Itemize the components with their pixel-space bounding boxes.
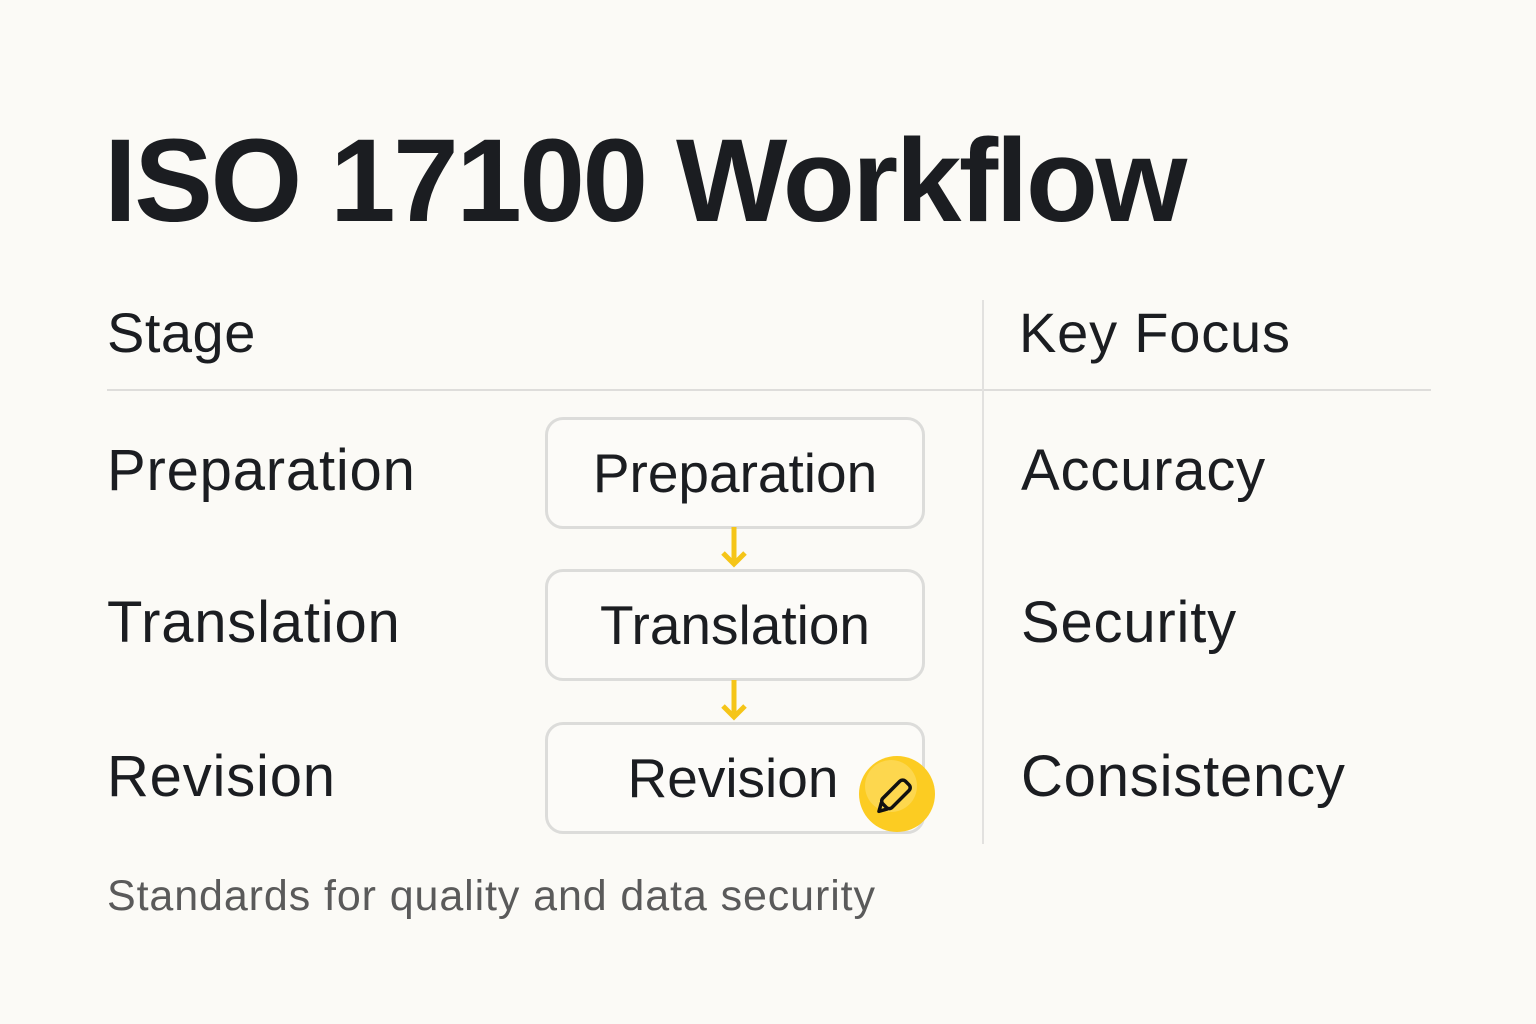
arrow 1 bbox=[721, 527, 747, 568]
stage: revision: Revision bbox=[107, 744, 336, 809]
stage: translation: Translation bbox=[107, 590, 401, 655]
focus: consistency: Consistency bbox=[1021, 744, 1346, 809]
box: preparation bbox=[545, 417, 925, 529]
focus: accuracy: Accuracy bbox=[1021, 438, 1266, 503]
box: revision bbox=[545, 722, 925, 834]
box: preparation: Preparation bbox=[593, 442, 877, 504]
table lines bbox=[107, 389, 1431, 391]
focus: security: Security bbox=[1021, 590, 1237, 655]
stage: preparation: Preparation bbox=[107, 438, 416, 503]
footer caption: Standards for quality and data security bbox=[107, 872, 876, 920]
arrow 2 bbox=[721, 680, 747, 720]
box: translation: Translation bbox=[600, 594, 870, 656]
header: stage: Stage bbox=[107, 301, 256, 364]
icon: pencil badge bbox=[859, 756, 935, 832]
header: key focus: Key Focus bbox=[1019, 301, 1291, 364]
box: revision: Revision bbox=[628, 747, 838, 809]
box: translation bbox=[545, 569, 925, 681]
title: ISO 17100 Workflow bbox=[104, 115, 1185, 247]
